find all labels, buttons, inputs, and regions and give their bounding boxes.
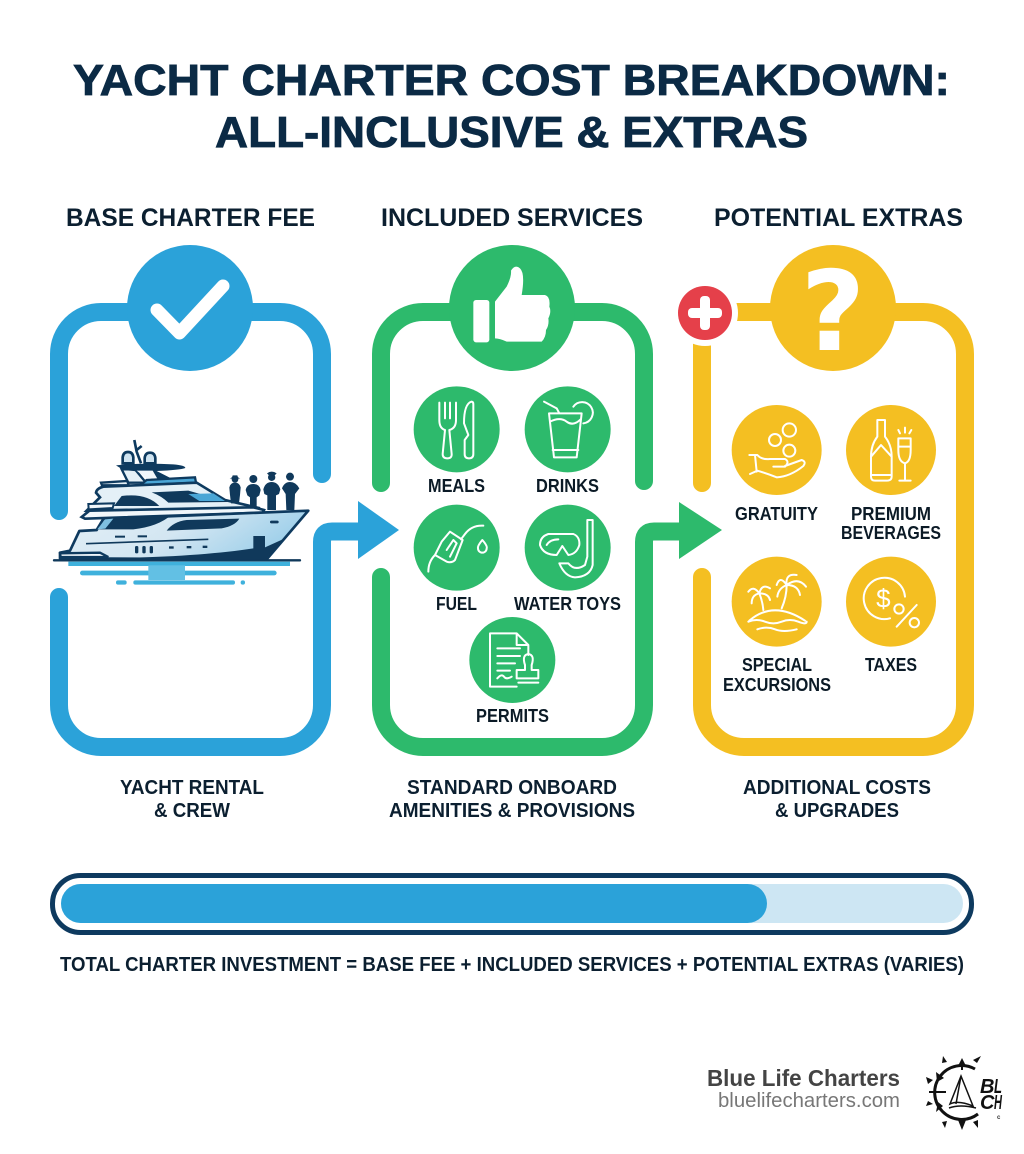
flybridge [122, 469, 146, 483]
arrow: green [679, 502, 722, 559]
upper deck [87, 483, 260, 511]
hull [60, 511, 308, 559]
icon: check badge [127, 245, 253, 371]
icon: premium beverages [846, 405, 936, 495]
icon: taxes [846, 557, 936, 647]
labels: included services: MEALS [428, 476, 485, 496]
icon: fuel nozzle [414, 505, 500, 591]
footer brand text: bluelifecharters.com [718, 1090, 900, 1112]
logo: compass and sailboat: L [994, 1076, 1002, 1098]
labels: potential extras: PREMIUM [851, 504, 931, 524]
panel: potential extras [672, 204, 965, 822]
labels: potential extras: TAXES [865, 655, 917, 675]
logo: compass and sailboat: B [980, 1076, 994, 1098]
heading: base charter fee: BASE CHARTER FEE [66, 204, 315, 232]
footer brand text [707, 1065, 900, 1112]
icon: question badge: ? [801, 248, 865, 377]
logo: compass and sailboat: c [997, 1115, 1001, 1121]
green panel outline [381, 312, 685, 747]
service icons [414, 386, 611, 703]
icon: permits document [469, 617, 555, 703]
icon: taxes: $ [876, 583, 891, 613]
yellow panel outline [702, 312, 965, 747]
icon: red plus badge [672, 280, 738, 346]
water [68, 562, 290, 585]
caption: yacht rental and crew [120, 777, 264, 822]
crew silhouettes [229, 472, 299, 510]
caption: standard amenities: AMENITIES & PROVISIONS [389, 800, 635, 822]
icon: drinks [525, 386, 611, 472]
footer brand text: Blue Life Charters [707, 1065, 900, 1091]
labels: included services: WATER TOYS [514, 594, 621, 614]
progress bar: total investment [52, 876, 972, 932]
caption: additional costs: & UPGRADES [775, 800, 899, 822]
caption: yacht rental and crew: YACHT RENTAL [120, 777, 264, 799]
labels: potential extras: SPECIAL [742, 655, 812, 675]
title: YACHT CHARTER COST BREAKDOWN: [73, 56, 950, 105]
caption: additional costs [743, 777, 931, 822]
labels: potential extras: EXCURSIONS [723, 675, 831, 695]
labels: included services: FUEL [436, 594, 477, 614]
labels: included services [428, 476, 621, 726]
extras icons [732, 405, 936, 647]
caption: standard amenities: STANDARD ONBOARD [407, 777, 617, 799]
arrow: blue [358, 501, 399, 559]
blue panel outline [59, 312, 365, 747]
mast and domes [123, 440, 155, 463]
labels: potential extras: GRATUITY [735, 504, 818, 524]
icon: special excursions [732, 557, 822, 647]
total formula text: TOTAL CHARTER INVESTMENT = BASE FEE + INCLUDED SERVICES + POTENTIAL EXTRAS (VARIES) [60, 954, 964, 976]
icon: meals [414, 386, 500, 472]
labels: included services: PERMITS [476, 706, 549, 726]
caption: standard amenities [389, 777, 635, 822]
labels: potential extras: BEVERAGES [841, 523, 941, 543]
title [73, 56, 950, 157]
logo: compass and sailboat [926, 1056, 1002, 1130]
caption: yacht rental and crew: & CREW [154, 800, 230, 822]
icon: water toys [525, 505, 611, 591]
illustration: yacht and crew [54, 440, 308, 585]
caption: additional costs: ADDITIONAL COSTS [743, 777, 931, 799]
icon: question badge [770, 245, 896, 377]
title: ALL-INCLUSIVE & EXTRAS [215, 108, 808, 157]
panel: base charter fee [54, 204, 399, 822]
heading: potential extras: POTENTIAL EXTRAS [714, 204, 963, 232]
labels: included services: DRINKS [536, 476, 599, 496]
heading: included services: INCLUDED SERVICES [381, 204, 643, 232]
icon: gratuity [732, 405, 822, 495]
icon: thumbs up badge [449, 245, 575, 371]
logo: compass and sailboat: H [994, 1092, 1002, 1114]
panel: included services [381, 204, 722, 822]
logo: compass and sailboat: C [980, 1092, 995, 1114]
labels: potential extras [723, 504, 941, 695]
main deck band [82, 507, 264, 519]
